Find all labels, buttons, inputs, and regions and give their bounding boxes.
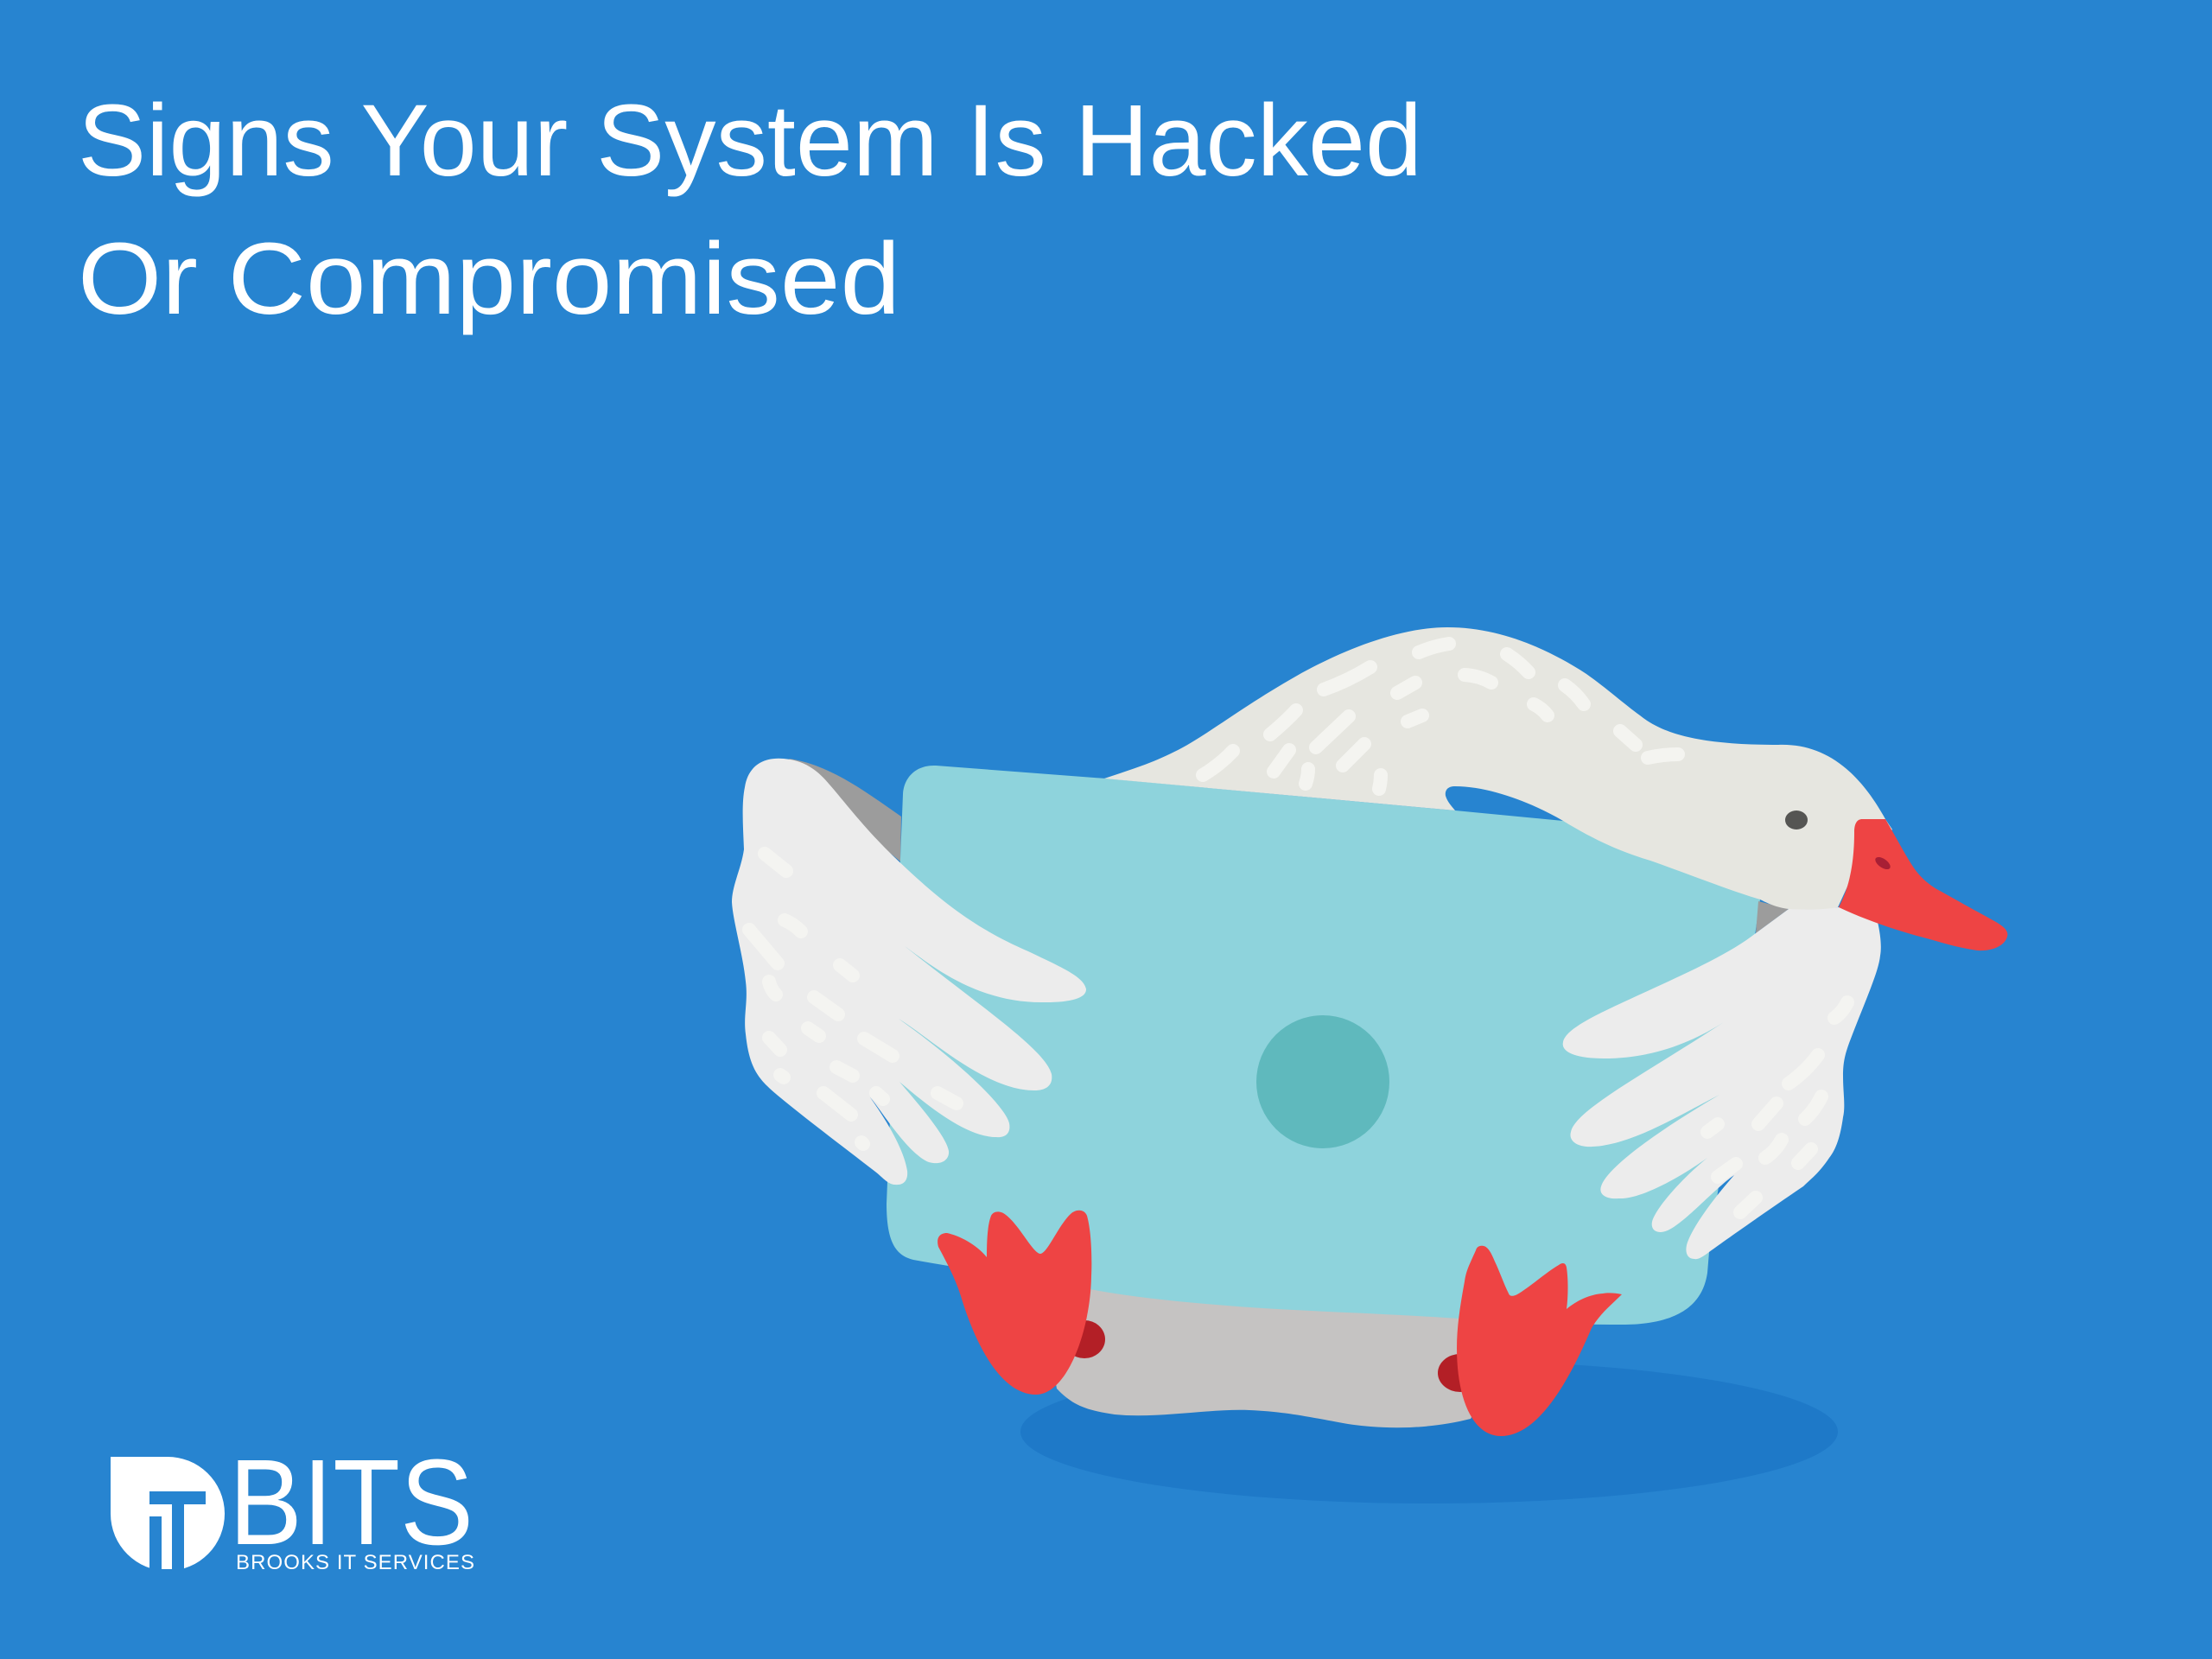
logo: BITS Brooks IT Services [111,1433,474,1574]
laptop logo circle [1256,1015,1389,1148]
illustration: goose hugging a laptop [732,627,2007,1503]
title [78,84,1422,336]
goose neck and head [1104,627,1892,910]
title: Or Compromised [78,222,900,336]
left foot [938,1211,1105,1395]
nostril [1873,855,1892,872]
eye [1785,810,1808,830]
logo wordmark: BITS [229,1433,474,1570]
right wing [1563,907,1881,1259]
left wing [732,759,1086,1185]
logo mark [111,1457,225,1573]
logo tagline: BROOKS IT SERVICES [236,1551,474,1574]
title: Signs Your System Is Hacked [78,84,1422,198]
laptop lid [887,766,1760,1325]
back of left wing [789,759,901,861]
right foot [1438,1246,1622,1436]
beak [1839,819,2007,950]
laptop base [1037,1279,1521,1427]
back of right wing [1756,901,1789,933]
ground shadow [1020,1360,1838,1503]
